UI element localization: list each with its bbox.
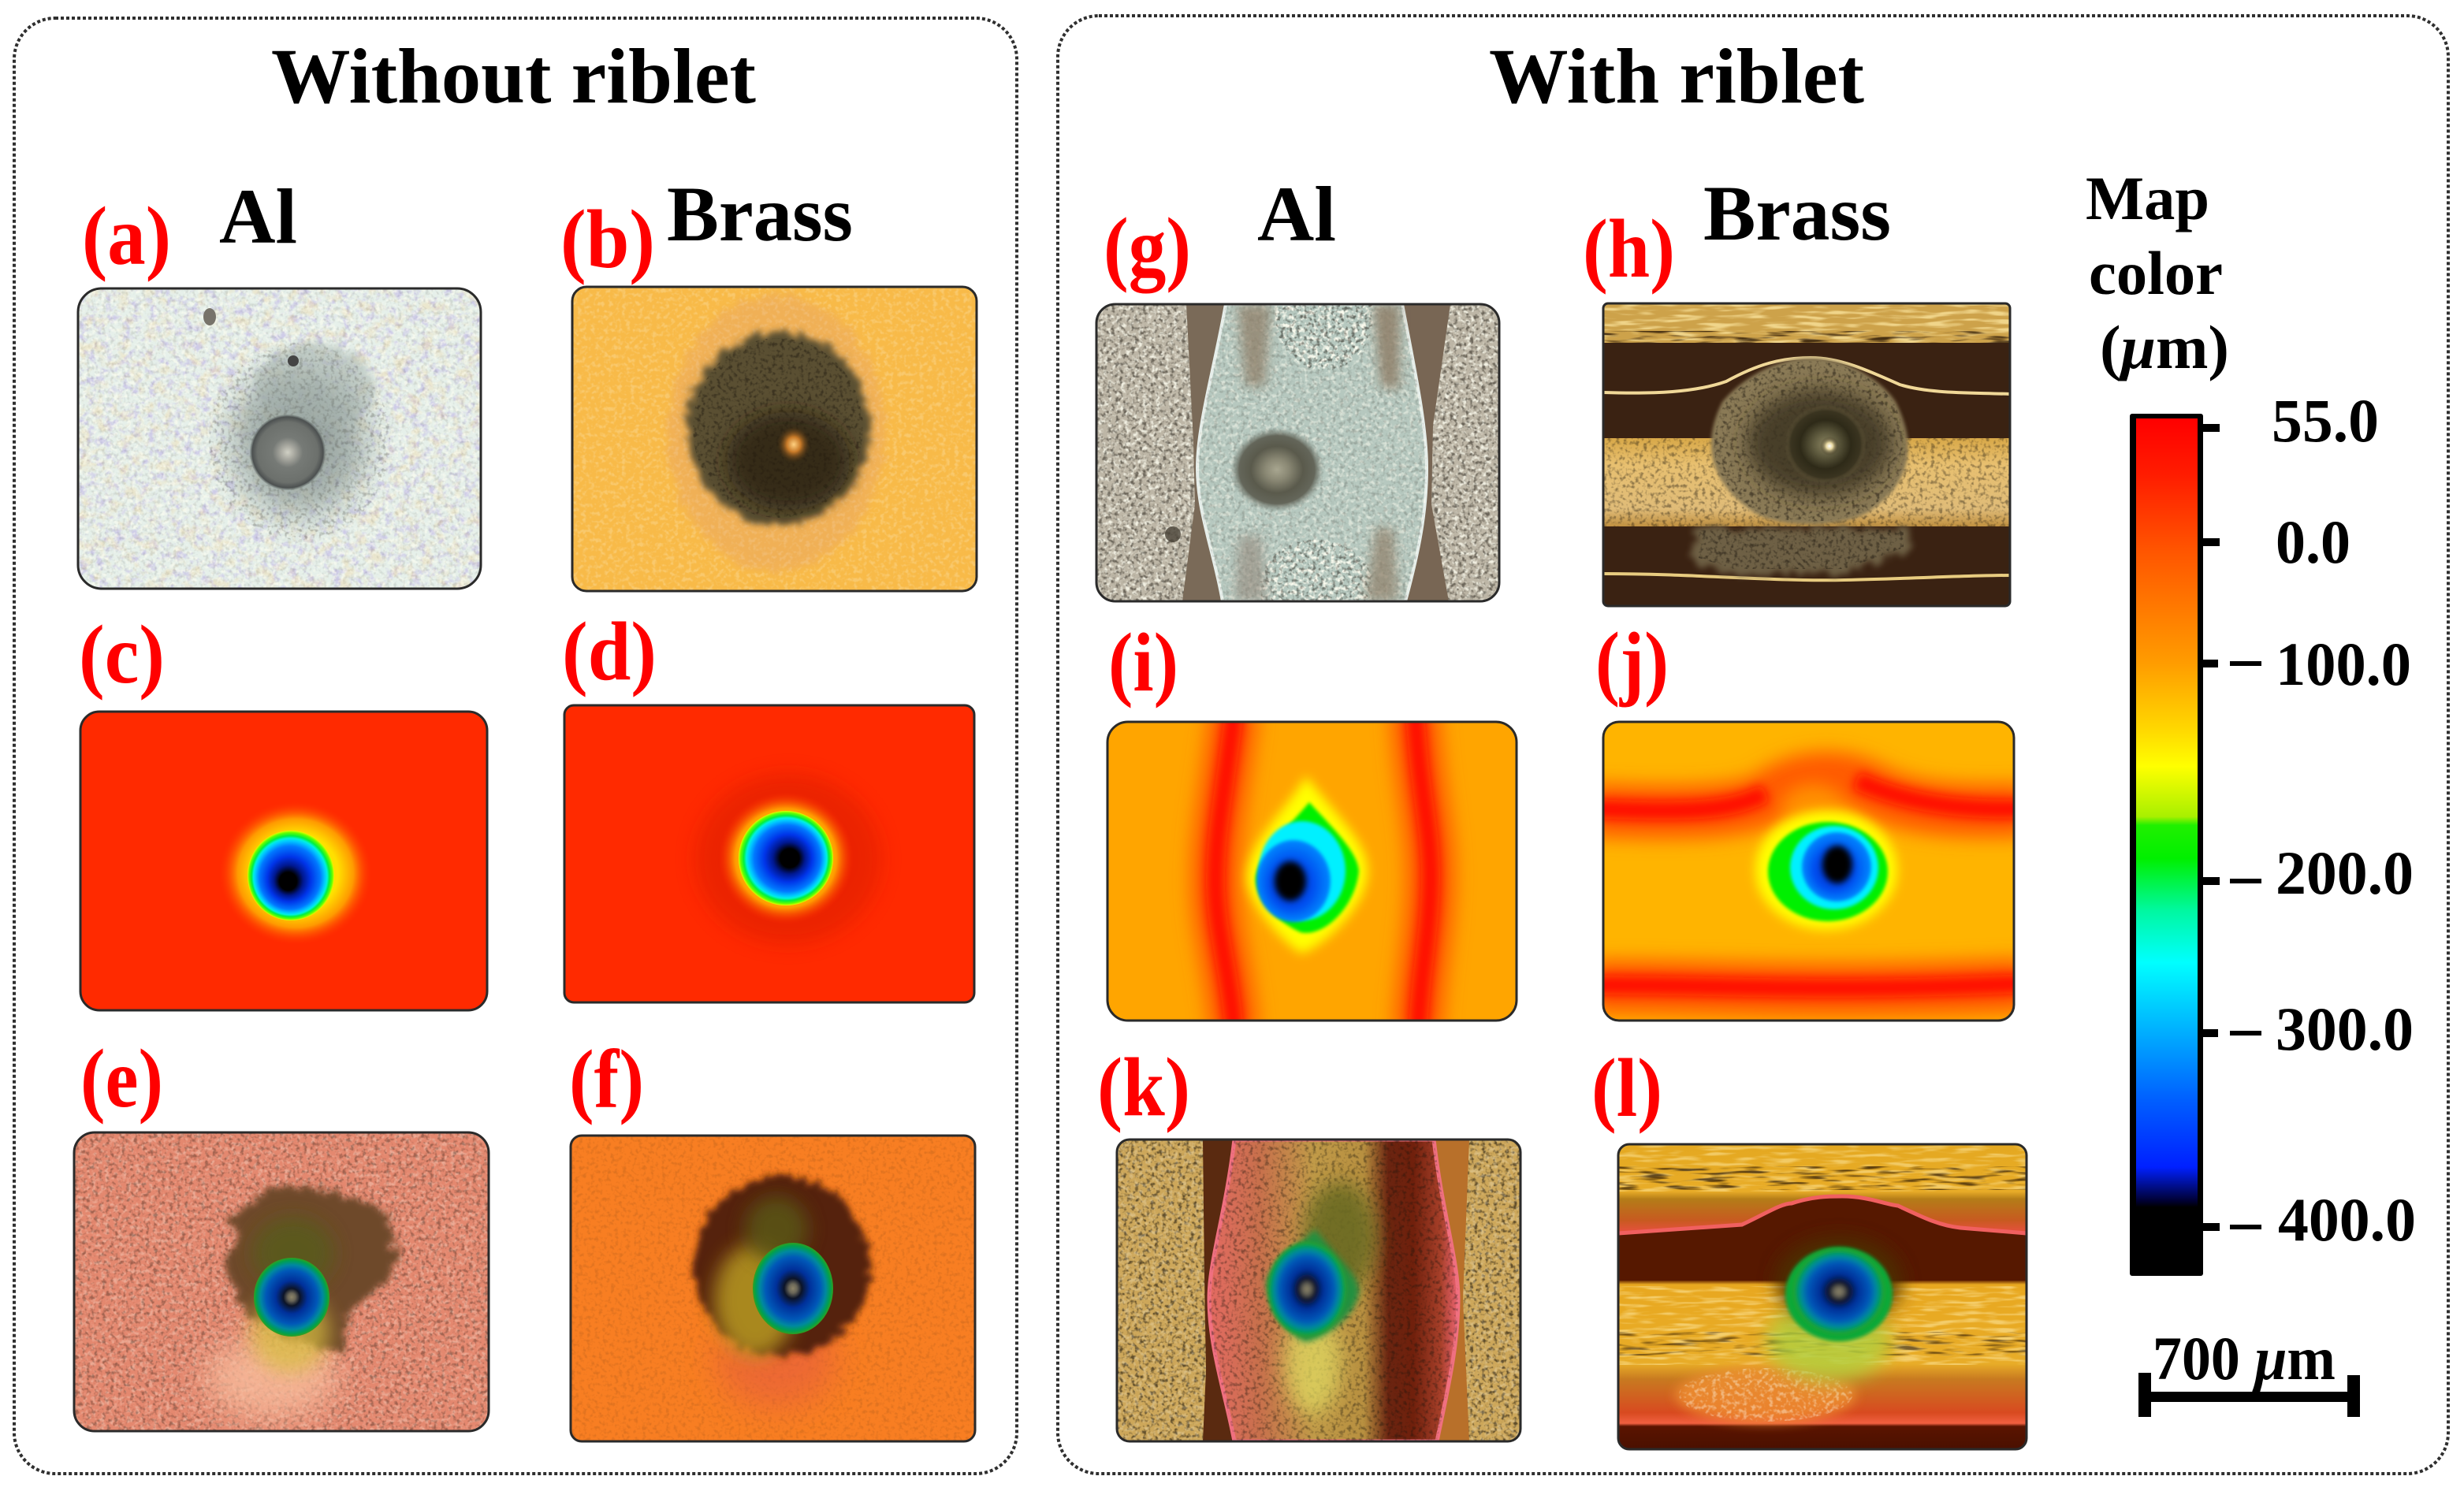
image (a): Al crater micrograph	[78, 288, 481, 589]
label (g): (g)	[1104, 201, 1191, 293]
image (i): Al riblet height map	[1107, 709, 1517, 1032]
colour scale tick labels: 200.0	[2276, 838, 2414, 907]
label (a): (a)	[82, 190, 171, 282]
label (h): (h)	[1583, 203, 1675, 295]
heading: Without riblet: Without riblet	[271, 32, 756, 120]
legend heading: Map color (µm): Map	[2086, 164, 2209, 232]
column heading: Al: Al	[1257, 170, 1336, 258]
label (d): (d)	[562, 605, 657, 697]
scale bar: 700 µm: 700 μm	[2153, 1324, 2336, 1392]
label (f): (f)	[569, 1033, 644, 1125]
colour scale tick labels: 100.0	[2276, 630, 2411, 698]
image (c): Al height map	[80, 712, 487, 1010]
label (c): (c)	[79, 608, 165, 701]
image (h): brass riblet micrograph	[1603, 303, 2010, 606]
colour scale tick labels	[2230, 386, 2416, 1254]
legend heading: Map color (µm)	[2086, 164, 2229, 381]
colour scale bar	[2130, 414, 2220, 1276]
image (e): Al overlay	[74, 1132, 489, 1431]
image (g): Al riblet micrograph	[1096, 303, 1501, 602]
colour scale tick labels: 400.0	[2278, 1185, 2416, 1254]
column heading: Brass: Brass	[667, 170, 853, 258]
label (j): (j)	[1595, 615, 1669, 708]
colour scale tick labels: 300.0	[2276, 995, 2414, 1063]
colour scale tick labels: 0.0	[2276, 508, 2350, 576]
image (b): brass crater micrograph	[572, 287, 977, 591]
column heading: Al: Al	[219, 173, 297, 260]
heading: With riblet: With riblet	[1489, 32, 1864, 120]
panel: without riblet	[14, 18, 1017, 1474]
image (d): brass height map	[564, 705, 974, 1002]
image (k): Al riblet overlay	[1117, 1140, 1520, 1441]
legend heading: Map color (µm): (μm)	[2100, 313, 2229, 381]
label (b): (b)	[560, 193, 655, 285]
image (f): brass overlay	[571, 1136, 975, 1441]
colour scale tick labels: 55.0	[2272, 386, 2379, 455]
label (k): (k)	[1097, 1041, 1190, 1133]
label (i): (i)	[1108, 616, 1178, 708]
image (l): brass riblet overlay	[1618, 1144, 2027, 1449]
image (j): brass riblet height map	[1592, 722, 2026, 1021]
column heading: Brass: Brass	[1703, 169, 1891, 257]
panel: with riblet	[1058, 16, 2448, 1474]
scale bar: 700 µm	[2138, 1324, 2360, 1417]
label (l): (l)	[1591, 1042, 1662, 1134]
legend heading: Map color (µm): color	[2089, 239, 2223, 307]
label (e): (e)	[80, 1032, 163, 1125]
